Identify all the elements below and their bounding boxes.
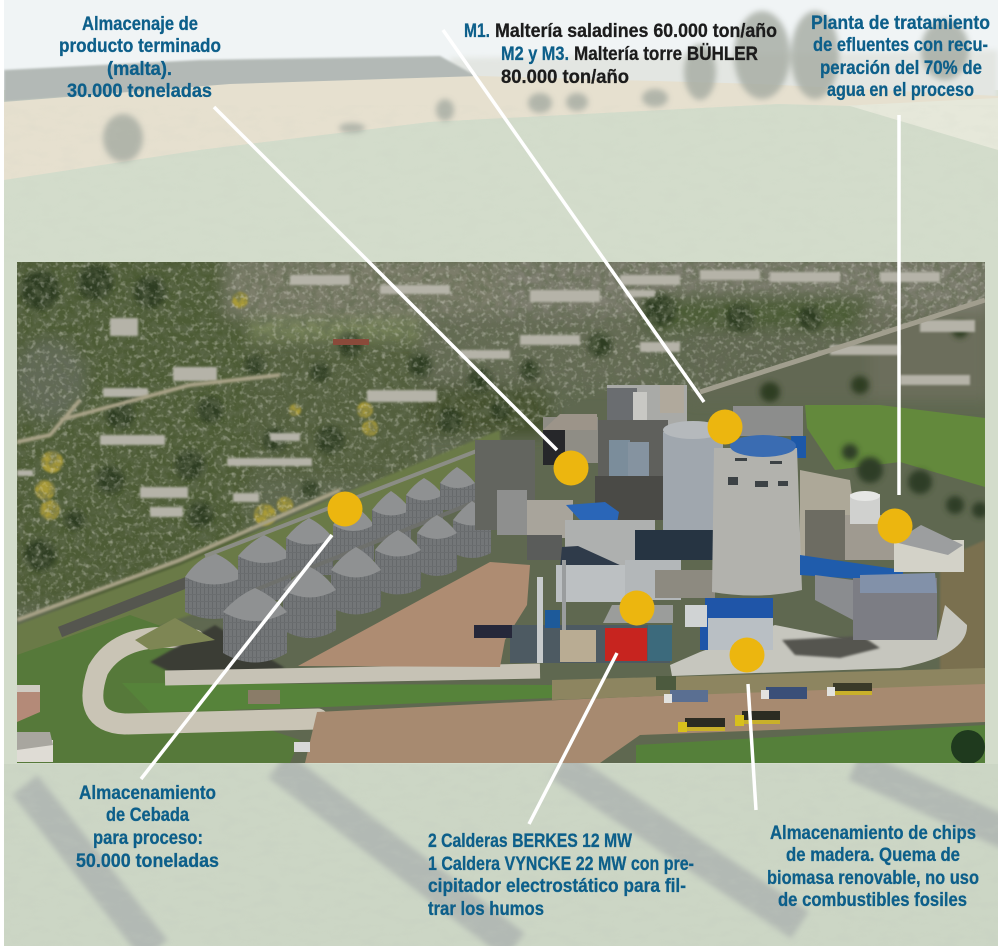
leader lines	[141, 30, 899, 824]
label: wood chips	[767, 822, 979, 911]
ground around plant	[800, 470, 852, 556]
label: wood chips: de madera. Quema de	[786, 844, 960, 866]
dirt yard	[298, 562, 530, 667]
label: malt storage: 30.000 toneladas	[67, 80, 212, 102]
marker dots	[328, 410, 912, 672]
dot: malting towers	[708, 410, 742, 444]
shadow of silos	[150, 624, 284, 670]
label: effluent treatment plant: agua en el proceso	[827, 79, 974, 101]
line: boilers	[529, 653, 617, 824]
brown strip under road	[552, 668, 985, 700]
dot: wood chips	[730, 638, 764, 672]
concrete apron	[670, 605, 967, 676]
label: barley storage: Almacenamiento	[79, 782, 216, 804]
line: wood chips	[748, 684, 756, 810]
dot: barley storage	[328, 492, 362, 526]
label: malting capacities: 80.000 ton/año	[501, 66, 629, 88]
road at left	[17, 375, 340, 620]
line: barley storage	[141, 535, 332, 779]
aerial photo of the plant	[10, 255, 990, 764]
tree lower right	[951, 730, 985, 764]
dot: boilers	[620, 590, 654, 626]
line: malt storage	[214, 107, 557, 450]
label: malt storage: producto terminado	[59, 35, 221, 57]
red boiler	[605, 628, 647, 661]
line: effluent plant	[897, 115, 901, 495]
label: boilers	[428, 830, 694, 920]
label: malting capacities: M1.	[464, 20, 490, 42]
trucks	[664, 683, 872, 732]
label: wood chips: de combustibles fosiles	[778, 889, 967, 911]
label: boilers: trar los humos	[428, 898, 544, 920]
grass and railway band	[17, 430, 500, 654]
blue and white storage building	[685, 598, 773, 650]
trees below field	[842, 444, 988, 518]
concrete access road	[93, 637, 318, 724]
label: malting capacities: M2 y M3.	[501, 43, 569, 65]
surrounding town and vegetation	[17, 262, 985, 620]
storage silos	[185, 442, 505, 662]
label: barley storage	[76, 782, 219, 872]
small buildings lower left	[17, 685, 53, 762]
shadow on apron	[782, 636, 880, 658]
label: barley storage: para proceso:	[93, 827, 203, 849]
small parked vehicle and shed	[248, 625, 676, 752]
concrete plant road	[165, 671, 540, 678]
label: effluent treatment plant	[811, 12, 990, 101]
malting plant buildings	[475, 385, 964, 640]
boiler area	[510, 560, 673, 663]
label: malt storage	[59, 13, 221, 102]
label: boilers: 1 Caldera VYNCKE 22 MW con pre-	[428, 853, 694, 875]
label: malt storage: Almacenaje de	[82, 13, 198, 35]
green field at right	[805, 405, 985, 487]
lower left grass	[17, 615, 300, 763]
label: barley storage: de Cebada	[106, 804, 189, 826]
main road at right	[700, 300, 985, 392]
label: barley storage: 50.000 toneladas	[76, 850, 219, 872]
label: malting capacities	[464, 20, 777, 88]
label: boilers: 2 Calderas BERKES 12 MW	[428, 830, 632, 852]
lower grass at right	[636, 725, 985, 763]
label: malting capacities: Maltería saladines 60.000 ton/año	[495, 20, 777, 42]
label: malting capacities: Maltería torre BÜHLER	[574, 42, 758, 65]
dot: malt storage	[554, 450, 588, 486]
label: boilers: cipitador electrostático para fil-	[428, 875, 686, 897]
green strip along plant	[122, 683, 552, 712]
line: malting towers	[443, 30, 704, 402]
label: malt storage: (malta).	[107, 58, 172, 80]
dirt truck area	[305, 682, 985, 763]
dot: effluent plant	[878, 508, 912, 544]
